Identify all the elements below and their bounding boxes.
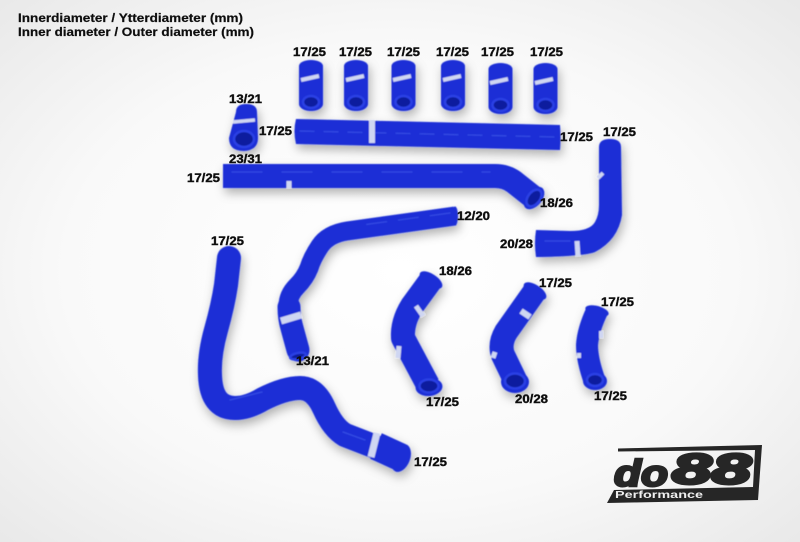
hose: long straight hose: [294, 119, 560, 150]
hose: 12/20 to 13/21 formed hose: [281, 206, 458, 361]
hose: 13/21 to 23/31 reducer: [229, 104, 258, 151]
hose: 17/25 to 20/28 elbow: [493, 279, 549, 393]
diameter labels: 17/25: [594, 389, 627, 403]
logo: do88 Performance: do: [614, 453, 668, 494]
diameter labels: 17/25: [187, 171, 220, 185]
diameter labels: 17/25: [560, 130, 593, 144]
diameter labels: 23/31: [229, 152, 262, 166]
diameter labels: 17/25: [426, 395, 459, 409]
diameter labels: 17/25: [387, 45, 420, 59]
diameter labels: 17/25: [259, 124, 292, 138]
hose: 17/25 small elbow: [579, 303, 610, 390]
hose: short coupler 3: [392, 60, 416, 111]
diameter labels: 13/21: [296, 354, 329, 368]
diameter labels: [187, 45, 636, 469]
hose: short coupler 1: [299, 60, 323, 111]
hose: large formed hose: [210, 258, 415, 475]
hose: short coupler 2: [344, 60, 368, 111]
heading: diameter legend: Innerdiameter / Ytterdiameter (mm): [18, 13, 243, 25]
diameter labels: 20/28: [500, 237, 533, 251]
diameter labels: 17/25: [530, 45, 563, 59]
hose: 18/26 to 17/25 elbow: [398, 268, 445, 397]
hose: short coupler 6: [534, 63, 558, 114]
diameter labels: 17/25: [603, 125, 636, 139]
heading: diameter legend: Inner diameter / Outer diameter (mm): [18, 27, 254, 39]
diameter labels: 13/21: [229, 92, 262, 106]
diameter labels: 17/25: [211, 234, 244, 248]
diameter labels: 17/25: [539, 276, 572, 290]
hose: 17/25 to 20/28 L-shaped hose: [535, 139, 622, 257]
diameter labels: 18/26: [439, 264, 472, 278]
hose: long hose with angled end: [223, 172, 548, 213]
diameter labels: 17/25: [339, 45, 372, 59]
heading: diameter legend: [18, 13, 254, 39]
diameter labels: 17/25: [601, 295, 634, 309]
diameter labels: 18/26: [540, 196, 573, 210]
diameter labels: 17/25: [414, 455, 447, 469]
diameter labels: 20/28: [515, 392, 548, 406]
logo: do88 Performance: Performance: [615, 489, 703, 501]
diameter labels: 17/25: [436, 45, 469, 59]
diameter labels: 17/25: [481, 45, 514, 59]
diameter labels: 12/20: [457, 209, 490, 223]
hose: short coupler 5: [488, 63, 512, 114]
diameter labels: 17/25: [293, 45, 326, 59]
logo: do88 Performance: [607, 445, 762, 503]
hose: short coupler 4: [441, 60, 465, 111]
logo: do88 Performance: 88: [672, 446, 751, 494]
